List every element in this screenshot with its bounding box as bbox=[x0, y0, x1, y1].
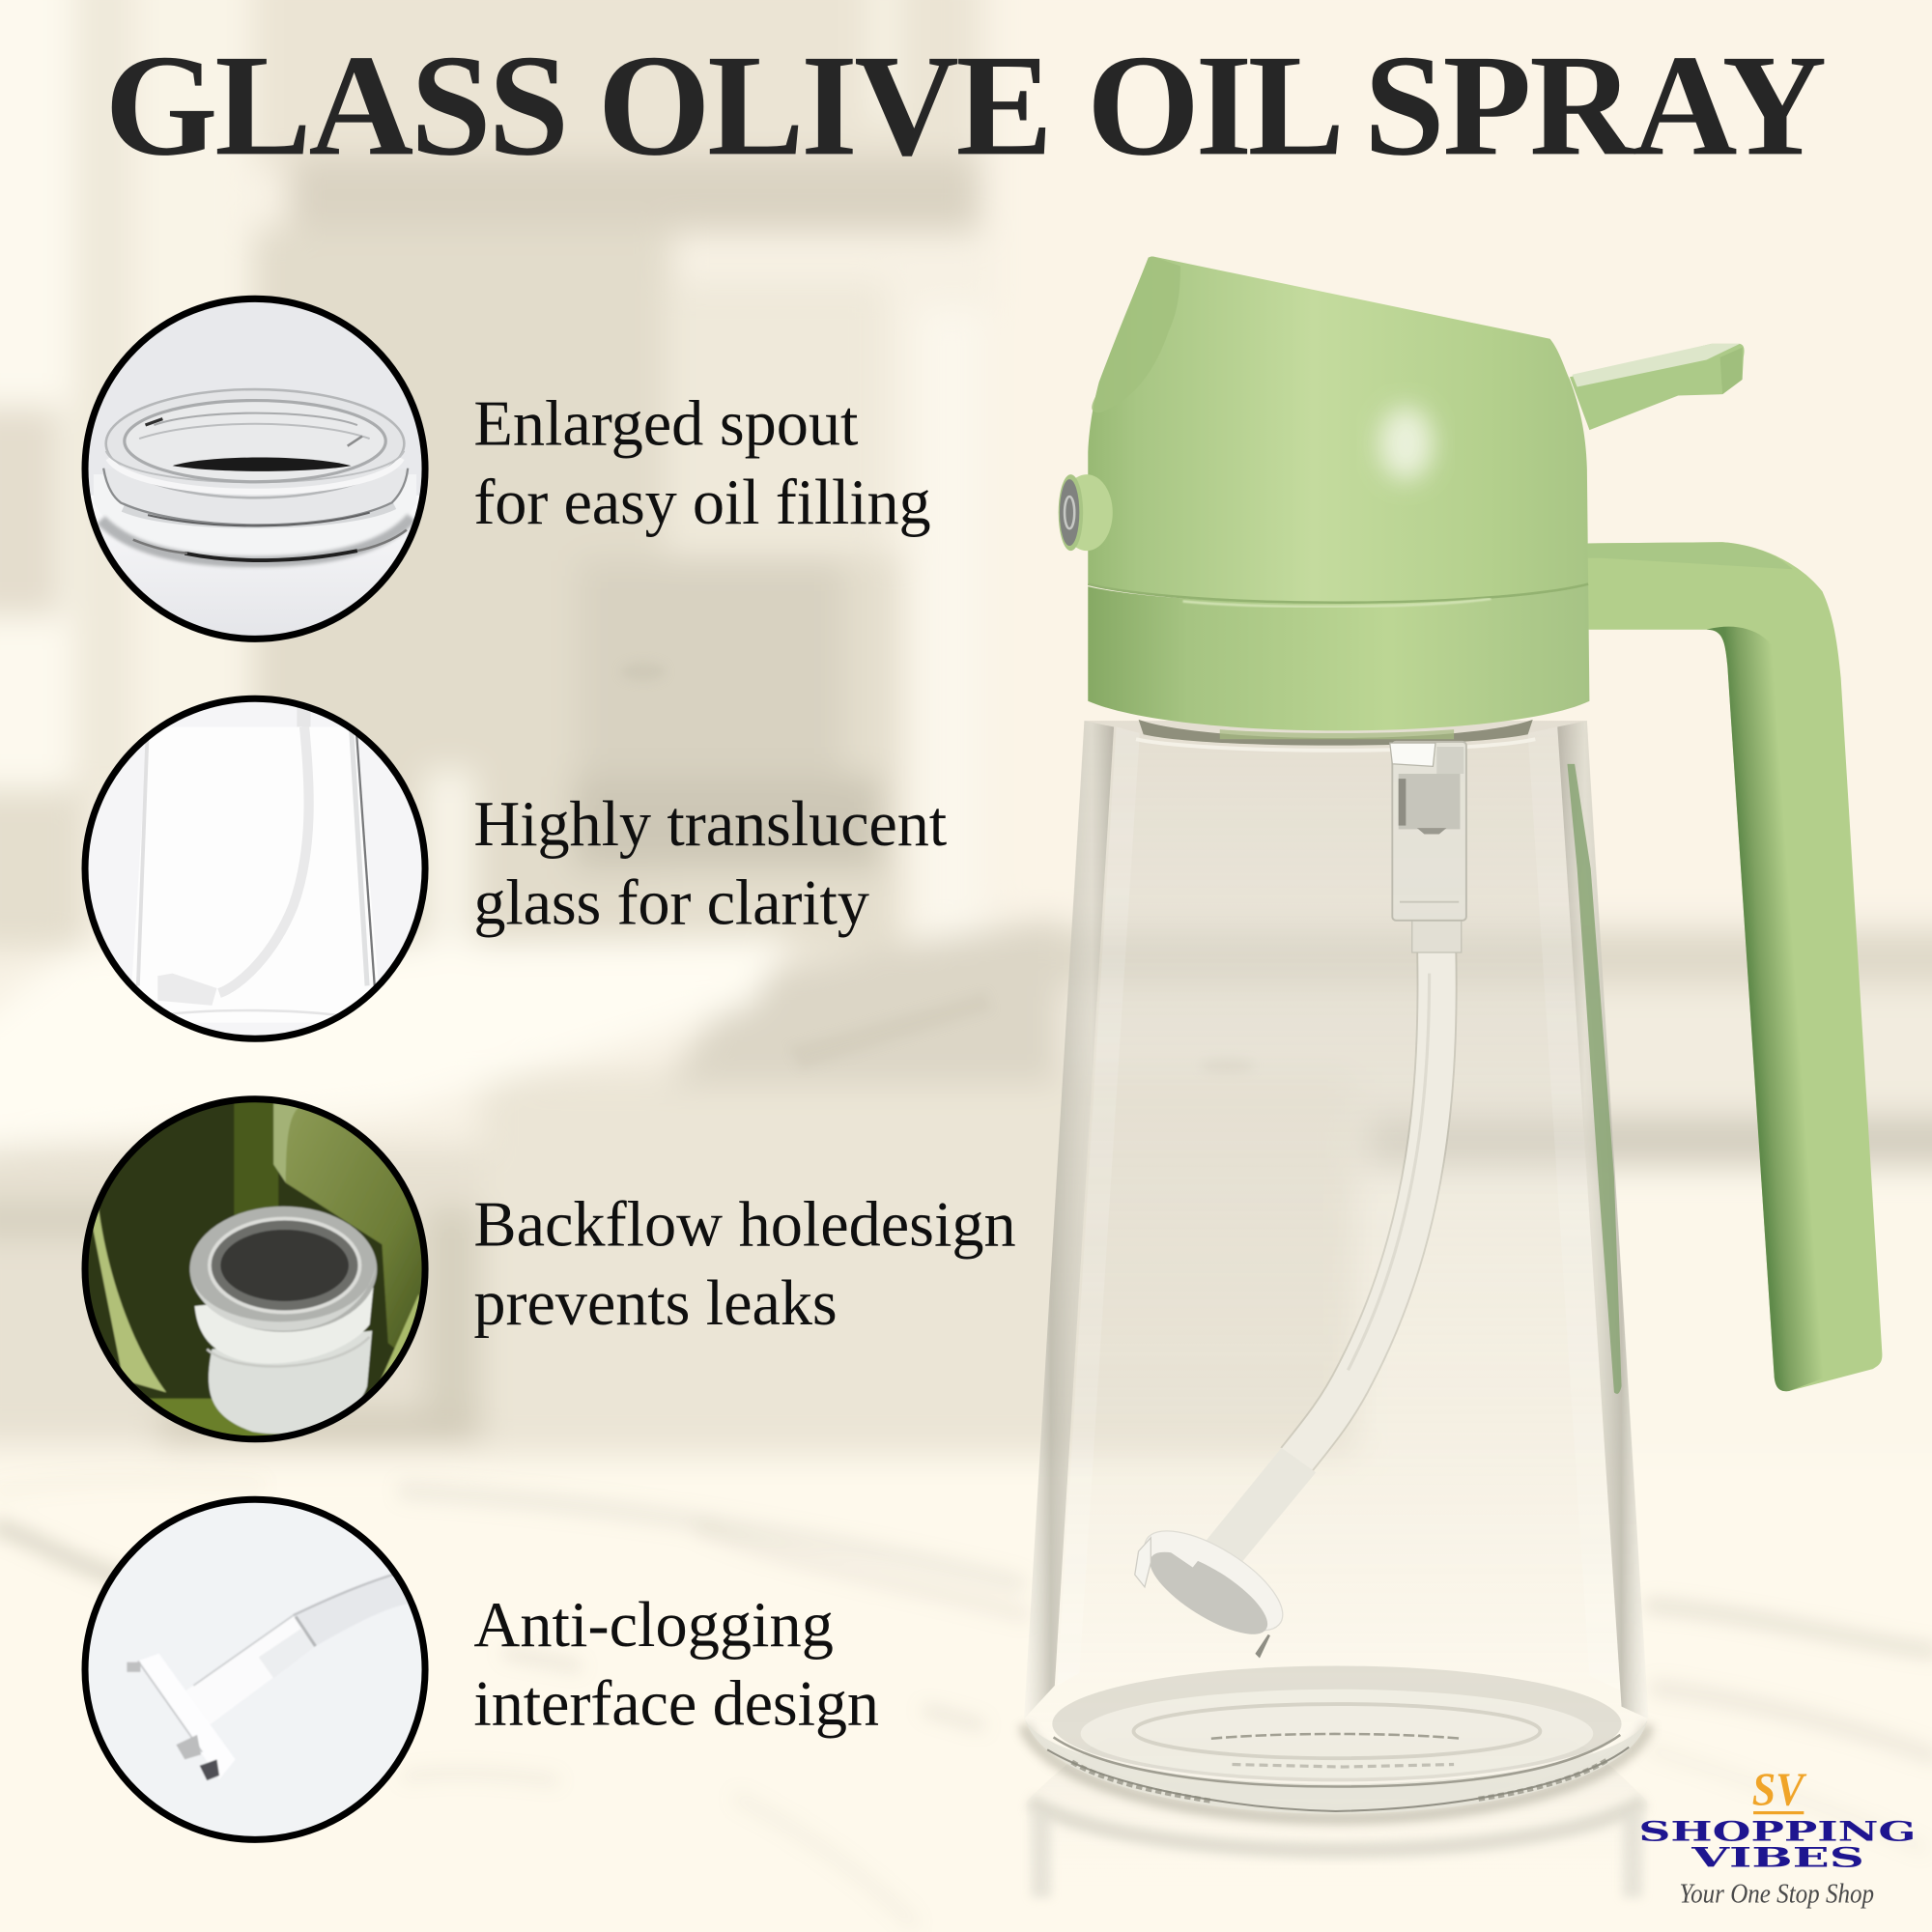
text: backflow hole: prevents leaks bbox=[473, 1268, 838, 1339]
bottle bbox=[1024, 256, 1882, 1897]
glass body bbox=[1024, 720, 1649, 1814]
bottle reflection bbox=[1026, 1737, 1647, 1897]
base shadow bbox=[1024, 1725, 1649, 1819]
panel: feature 2, translucent glass bbox=[74, 690, 948, 1047]
panel: feature 1, enlarged spout bbox=[74, 290, 931, 647]
text: enlarged spout: for easy oil filling bbox=[473, 468, 931, 538]
handle bbox=[1587, 542, 1882, 1391]
logo tagline: Your One Stop Shop bbox=[1680, 1879, 1874, 1909]
side button bbox=[1059, 474, 1113, 551]
icon: white tube end photo bbox=[74, 1491, 443, 1848]
text: enlarged spout: Enlarged spout bbox=[473, 388, 859, 459]
logo underline bbox=[1753, 1811, 1804, 1814]
icon: glass rim photo bbox=[74, 290, 443, 647]
text: translucent glass: glass for clarity bbox=[473, 868, 869, 939]
icon: metal nozzle photo bbox=[74, 1091, 443, 1448]
logo: Shopping Vibes bbox=[1638, 1765, 1916, 1909]
text: anti-clogging: Anti-clogging bbox=[473, 1590, 834, 1661]
dip tube bbox=[1202, 921, 1462, 1571]
text: backflow hole: Backflow holedesign bbox=[473, 1190, 1016, 1261]
collar bbox=[1088, 584, 1589, 730]
title: OIL bbox=[1087, 24, 1341, 185]
lever bbox=[1570, 344, 1745, 430]
icon: clear glass photo bbox=[74, 690, 443, 1047]
panel: feature 4, anti-clogging bbox=[74, 1491, 879, 1848]
pump bbox=[1390, 742, 1466, 921]
title: SPRAY bbox=[1364, 24, 1825, 185]
panel: feature 3, backflow hole bbox=[74, 1091, 1016, 1448]
dip filter disc bbox=[1130, 1512, 1297, 1656]
logo mark SV: SV bbox=[1752, 1765, 1807, 1816]
text: translucent glass: Highly translucent bbox=[473, 789, 948, 860]
text: anti-clogging: interface design bbox=[473, 1669, 879, 1740]
logo wordmark: SHOPPING bbox=[1638, 1816, 1916, 1848]
cap bbox=[1088, 256, 1588, 607]
title: GLASS bbox=[104, 24, 566, 185]
title: OLIVE bbox=[598, 24, 1049, 185]
logo wordmark: VIBES bbox=[1690, 1841, 1864, 1873]
